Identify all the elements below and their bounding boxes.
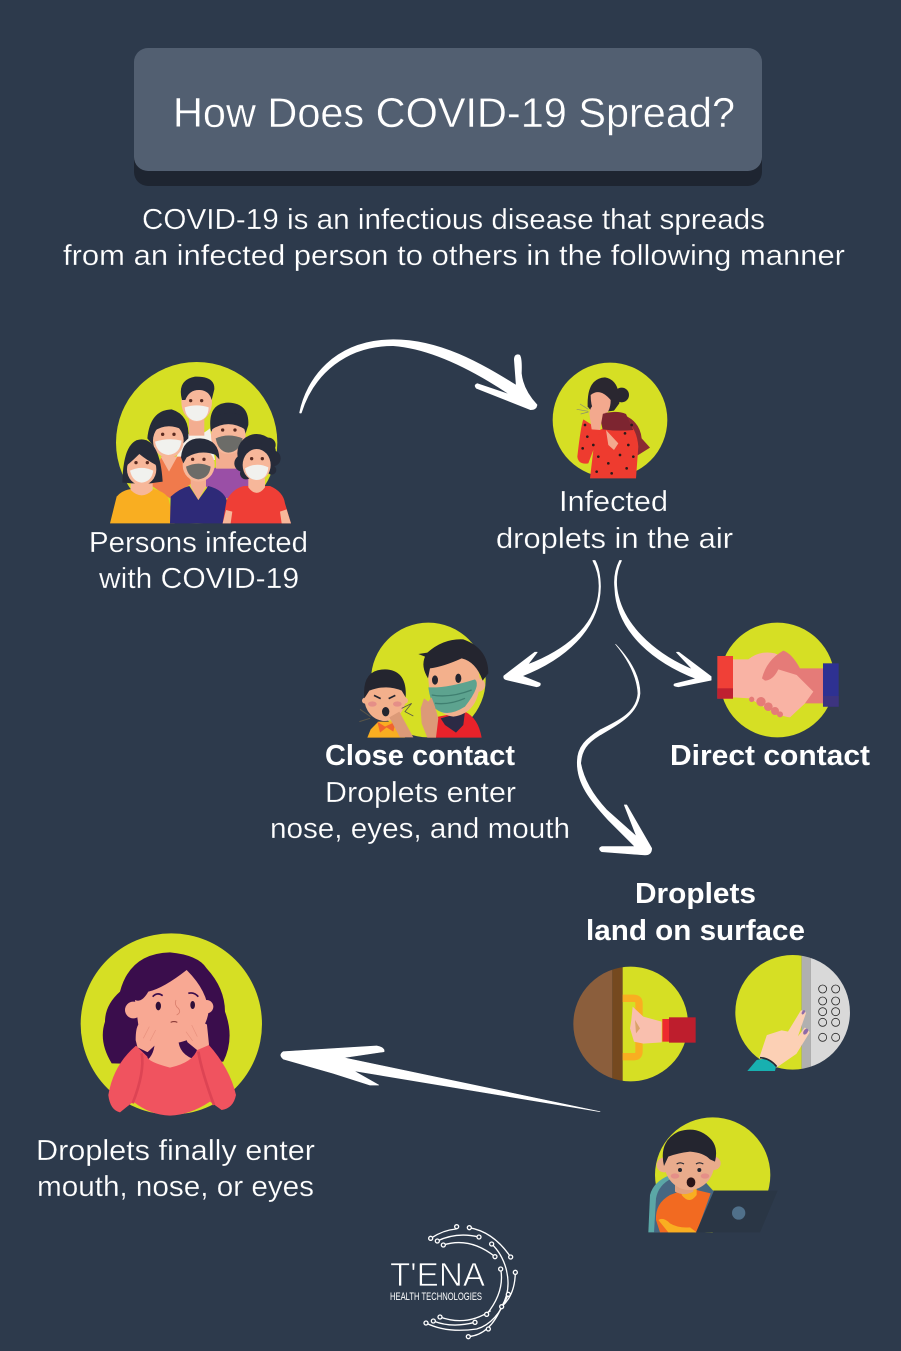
title banner	[134, 48, 762, 186]
icon: handshake	[717, 623, 839, 737]
label: droplets land on surface: Droplets	[635, 878, 756, 910]
label: droplets finally enter	[36, 1135, 315, 1203]
icon: hand on door handle	[570, 965, 696, 1085]
logo: Tena Health Technologies: T'ENA	[390, 1256, 485, 1293]
icon: group of infected people wearing masks	[110, 362, 291, 523]
label: close contact: nose, eyes, and mouth	[270, 813, 570, 845]
icon: boy at laptop	[648, 1117, 778, 1233]
label: close contact: Close contact	[325, 740, 515, 772]
icon: woman touching her face	[81, 933, 262, 1116]
intro text	[63, 204, 845, 272]
label: infected droplets: droplets in the air	[496, 523, 733, 555]
label: infected droplets	[496, 486, 733, 555]
label: close contact: Droplets enter	[325, 777, 516, 809]
label: droplets land on surface: land on surface	[586, 915, 805, 947]
label: persons infected: Persons infected	[89, 527, 308, 559]
label: infected droplets: Infected	[559, 486, 668, 518]
arrow: surface to face	[281, 1046, 600, 1112]
intro text: from an infected person to others in the following manner	[63, 240, 845, 272]
label: direct contact: Direct contact	[670, 740, 870, 772]
icon: coughing woman	[553, 363, 667, 478]
arrow: to direct contact	[615, 561, 711, 687]
intro text: COVID-19 is an infectious disease that spreads	[142, 204, 765, 236]
label: persons infected	[89, 527, 308, 595]
arrow: to surface	[577, 644, 652, 855]
label: droplets finally enter: mouth, nose, or eyes	[37, 1171, 314, 1203]
arrow: people to droplets	[300, 340, 537, 413]
icon: coughing boy and masked man	[359, 623, 488, 738]
label: close contact	[270, 740, 570, 845]
icon: finger pressing keypad	[733, 953, 853, 1073]
logo: Tena Health Technologies: HEALTH TECHNOLOGIES	[390, 1291, 482, 1303]
logo: Tena Health Technologies	[390, 1225, 517, 1339]
arrow: to close contact	[504, 561, 600, 687]
title: How Does COVID-19 Spread?	[173, 89, 735, 136]
label: droplets land on surface	[586, 878, 805, 947]
label: droplets finally enter: Droplets finally enter	[36, 1135, 315, 1167]
label: persons infected: with COVID-19	[98, 563, 299, 595]
